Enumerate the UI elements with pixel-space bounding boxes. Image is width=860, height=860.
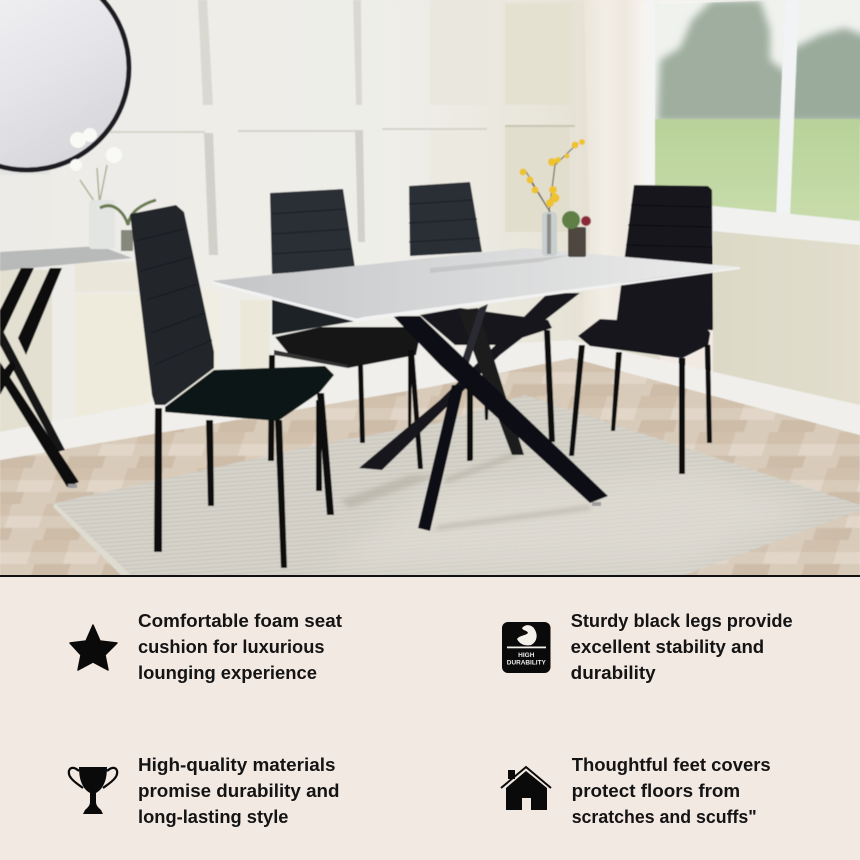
right wall bbox=[713, 231, 860, 410]
chair: back right bbox=[569, 185, 713, 474]
divider line bbox=[0, 575, 860, 577]
white flowers and vase bbox=[70, 128, 156, 251]
chair: front left bbox=[130, 205, 334, 568]
floor bbox=[0, 358, 860, 576]
text: foam seat: lounging experience bbox=[138, 662, 317, 683]
icon: trophy bbox=[69, 767, 117, 814]
feature: sturdy legs bbox=[502, 610, 793, 683]
text: sturdy legs: excellent stability and bbox=[571, 636, 764, 657]
feature: foam seat bbox=[70, 610, 342, 683]
text: feet covers: scratches and scuffs" bbox=[572, 806, 757, 827]
skirting board bbox=[0, 340, 860, 460]
text: quality materials: long-lasting style bbox=[138, 806, 288, 827]
icon: high durability badge: DURABILITY bbox=[507, 660, 546, 666]
window view bbox=[643, 0, 860, 245]
feature: quality materials bbox=[69, 754, 340, 827]
yellow flowers and vases bbox=[520, 139, 591, 257]
icon: high durability badge bbox=[502, 622, 550, 673]
panel: features bbox=[0, 577, 860, 860]
icon: high durability badge: HIGH bbox=[518, 652, 535, 659]
text: foam seat: cushion for luxurious bbox=[138, 636, 324, 657]
wall with panel moulding bbox=[0, 0, 660, 470]
table legs bbox=[359, 293, 608, 531]
chair: back centre bbox=[409, 182, 555, 461]
text: feet covers: Thoughtful feet covers bbox=[572, 754, 771, 775]
text: sturdy legs: durability bbox=[571, 662, 656, 683]
curtain bbox=[578, 0, 645, 345]
table top bbox=[212, 248, 740, 322]
text: sturdy legs: Sturdy black legs provide bbox=[571, 610, 793, 631]
text: foam seat: Comfortable foam seat bbox=[138, 610, 342, 631]
icon: star bbox=[70, 625, 117, 670]
photo: dining room scene bbox=[0, 0, 860, 576]
rug bbox=[53, 395, 860, 576]
rug shadows bbox=[340, 452, 590, 531]
mirror bbox=[0, 0, 129, 170]
icon: house bbox=[501, 767, 551, 810]
text: feet covers: protect floors from bbox=[572, 780, 740, 801]
text: quality materials: High-quality materials bbox=[138, 754, 336, 775]
window frame bbox=[643, 0, 655, 190]
chair: back left bbox=[268, 189, 423, 469]
feature: feet covers bbox=[501, 754, 771, 827]
text: quality materials: promise durability and bbox=[138, 780, 340, 801]
console table bbox=[0, 246, 132, 488]
